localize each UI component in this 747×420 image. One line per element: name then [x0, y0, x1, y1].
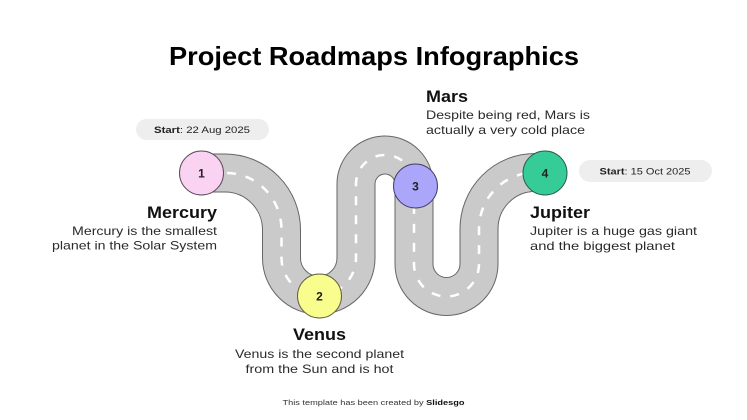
text block: Mercury: Mercury — [147, 204, 218, 222]
title: Project Roadmaps Infographics — [169, 41, 579, 71]
marker 2 — [298, 274, 342, 318]
footer credit: This template has been created by Slidesgo — [282, 398, 465, 407]
start date pill: Mercury — [136, 119, 269, 140]
text block: Jupiter: and the biggest planet — [530, 239, 676, 253]
marker 4 — [523, 151, 567, 195]
marker 1 — [180, 151, 224, 195]
start date pill: Mercury: Start : 22 Aug 2025 — [154, 125, 250, 136]
start date pill: Jupiter: Start : 15 Oct 2025 — [600, 166, 690, 178]
text block: Mars — [426, 88, 590, 137]
marker 2: 2 — [316, 290, 323, 304]
text block: Mars: Despite being red, Mars is — [426, 108, 590, 122]
start date pill: Jupiter — [579, 160, 712, 182]
text block: Mercury — [52, 204, 218, 252]
text block: Venus: Venus — [293, 326, 346, 344]
marker 3: 3 — [412, 180, 419, 194]
text block: Mars: actually a very cold place — [426, 123, 585, 137]
text block: Venus — [235, 326, 405, 376]
marker 3 — [394, 164, 438, 208]
marker 4: 4 — [542, 166, 549, 180]
text block: Jupiter: Jupiter — [530, 204, 591, 222]
text block: Venus: Venus is the second planet — [235, 347, 405, 361]
text block: Venus: from the Sun and is hot — [246, 362, 394, 376]
text block: Mercury: Mercury is the smallest — [72, 224, 218, 238]
winding road — [201, 155, 545, 296]
text block: Jupiter: Jupiter is a huge gas giant — [530, 224, 698, 238]
text block: Jupiter — [530, 204, 698, 253]
text block: Mars: Mars — [426, 88, 468, 106]
text block: Mercury: planet in the Solar System — [52, 238, 217, 252]
marker 1: 1 — [198, 166, 205, 180]
